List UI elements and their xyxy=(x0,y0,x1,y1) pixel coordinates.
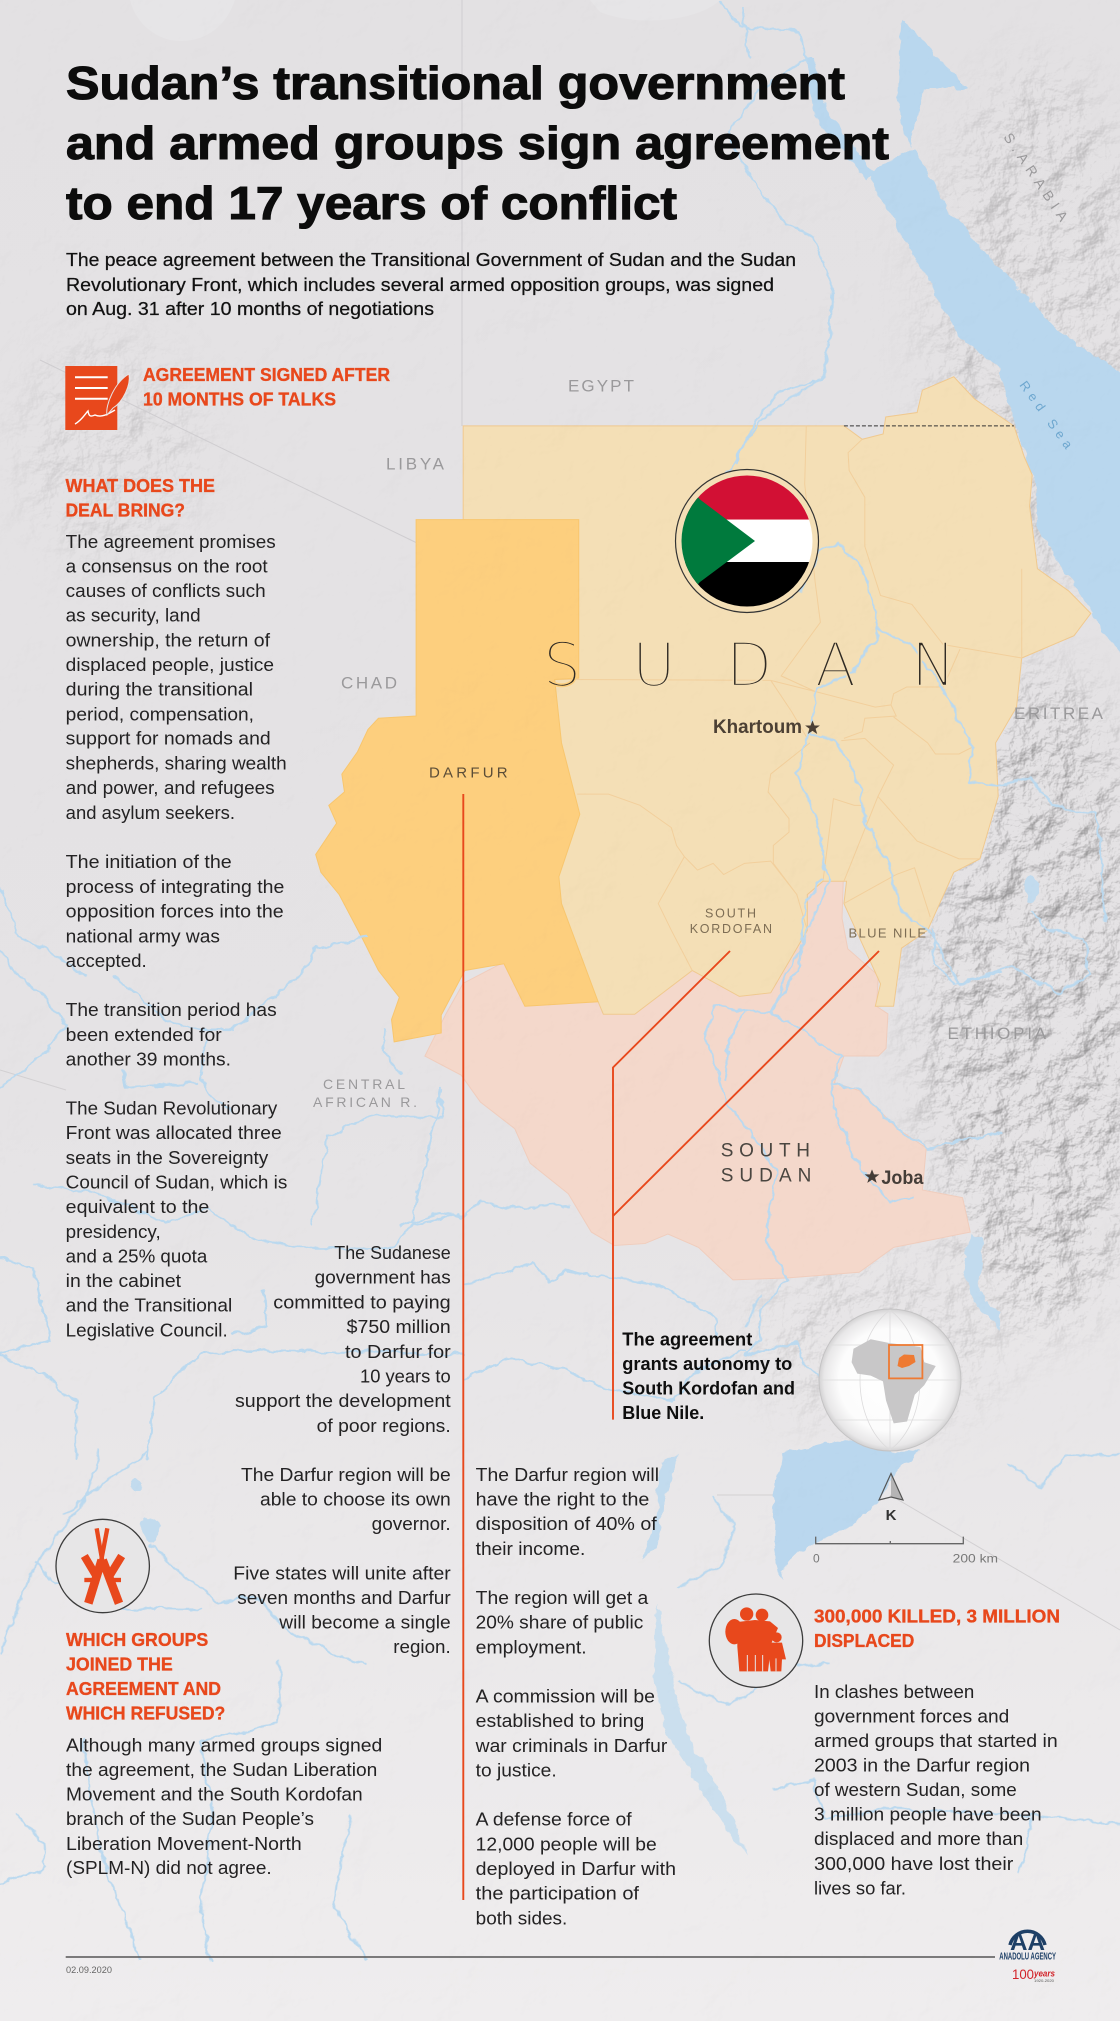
text block: what the deal brings: equivalent to the xyxy=(66,1197,209,1217)
text block: Darfur rights: 12,000 people will be xyxy=(476,1834,657,1854)
region labels: BLUE NILE xyxy=(848,925,926,940)
text block: Darfur rights: war criminals in Darfur xyxy=(475,1736,667,1756)
text block: what the deal brings: national army was xyxy=(66,926,220,946)
text block: what the deal brings: period, compensation, xyxy=(66,704,254,724)
text block: Darfur rights: established to bring xyxy=(476,1711,644,1731)
callout: autonomy: The agreement xyxy=(622,1330,752,1350)
text block: government commitments to Darfur: of poor regions. xyxy=(317,1416,451,1436)
text block: government commitments to Darfur: The Sudanese xyxy=(334,1243,451,1263)
scale bar: 0 xyxy=(813,1552,820,1566)
text block: what the deal brings: another 39 months. xyxy=(66,1050,231,1070)
text block: Darfur rights: both sides. xyxy=(476,1908,567,1928)
text block: groups xyxy=(66,1736,382,1878)
heading: agreement signed: 10 MONTHS OF TALKS xyxy=(143,389,336,410)
text block: killed and displaced: 3 million people have been xyxy=(814,1805,1042,1825)
heading: what does the deal bring xyxy=(66,475,215,521)
title xyxy=(66,57,889,229)
text block: what the deal brings: Legislative Council. xyxy=(66,1320,228,1340)
text block: what the deal brings xyxy=(66,532,287,1340)
region labels: DARFUR xyxy=(429,765,508,782)
logo: Anadolu Agency: AA xyxy=(1010,1929,1045,1956)
heading: which groups joined: WHICH GROUPS xyxy=(66,1629,208,1650)
text block: government commitments to Darfur: will become a single xyxy=(278,1612,451,1632)
text block: government commitments to Darfur: support the development xyxy=(235,1391,451,1411)
text block: Darfur rights: to justice. xyxy=(476,1761,557,1781)
logo: Anadolu Agency: 100 xyxy=(1012,1966,1034,1982)
text block: Darfur rights: employment. xyxy=(476,1637,587,1657)
text block: what the deal brings: been extended for xyxy=(66,1025,222,1045)
country labels: LIBYA xyxy=(386,455,445,474)
text block: what the deal brings: The agreement promises xyxy=(66,532,276,552)
country labels xyxy=(313,130,1104,1110)
flag of Sudan xyxy=(676,470,818,612)
text block: government commitments to Darfur: to Darfur for xyxy=(345,1342,451,1362)
subtitle: The peace agreement between the Transitional Government of Sudan and the Sudan xyxy=(66,249,796,270)
capital: Juba xyxy=(865,1168,924,1189)
heading: killed and displaced: DISPLACED xyxy=(814,1630,914,1651)
heading: which groups joined: AGREEMENT AND xyxy=(66,1678,221,1699)
heading: what does the deal bring: DEAL BRING? xyxy=(66,500,185,521)
text block: what the deal brings: support for nomads and xyxy=(66,729,271,749)
text block: what the deal brings: and the Transitional xyxy=(66,1296,232,1316)
text block: government commitments to Darfur: region. xyxy=(393,1637,451,1657)
region labels: SOUTH xyxy=(721,1141,810,1162)
text block: Darfur rights: A defense force of xyxy=(476,1810,633,1830)
leader lines xyxy=(463,794,879,1900)
country labels: AFRICAN R. xyxy=(313,1094,417,1110)
text block: what the deal brings: The initiation of the xyxy=(66,852,232,872)
region labels xyxy=(429,765,926,1187)
text block: what the deal brings: and a 25% quota xyxy=(66,1246,208,1266)
lakes xyxy=(130,877,1038,1855)
text block: killed and displaced: In clashes between xyxy=(814,1682,974,1702)
icon: document and pen xyxy=(65,366,129,430)
text block: killed and displaced: government forces and xyxy=(814,1706,1009,1726)
text block: groups: Although many armed groups signed xyxy=(66,1736,382,1756)
text block: killed and displaced: 300,000 have lost their xyxy=(814,1854,1013,1874)
text block: what the deal brings: shepherds, sharing wealth xyxy=(66,753,287,773)
capital: Khartoum: Khartoum xyxy=(713,717,802,738)
subtitle: on Aug. 31 after 10 months of negotiations xyxy=(66,298,434,319)
text block: Darfur rights: 20% share of public xyxy=(476,1613,643,1633)
region labels: SOUTH xyxy=(705,906,756,920)
label: Sudan: UDAN xyxy=(632,631,956,701)
scale bar: 200 km xyxy=(953,1552,998,1566)
region labels: KORDOFAN xyxy=(690,922,772,936)
text block: what the deal brings: opposition forces into the xyxy=(66,902,284,922)
label: Sudan: S xyxy=(543,631,581,701)
map: Darfur xyxy=(316,520,598,1042)
text block: what the deal brings: during the transitional xyxy=(66,680,253,700)
text block: Darfur rights xyxy=(475,1465,676,1928)
text block: what the deal brings: process of integrating the xyxy=(66,877,284,897)
text block: government commitments to Darfur: seven months and Darfur xyxy=(237,1588,451,1608)
country labels: S.ARABIA xyxy=(1001,130,1072,225)
text block: government commitments to Darfur: $750 million xyxy=(347,1317,451,1337)
heading: agreement signed xyxy=(143,364,390,410)
subtitle xyxy=(66,249,796,319)
text block: what the deal brings: Council of Sudan, which is xyxy=(66,1173,287,1193)
country labels: EGYPT xyxy=(568,376,634,396)
red sea xyxy=(805,19,1120,680)
text block: Darfur rights: their income. xyxy=(476,1539,585,1559)
text block: what the deal brings: a consensus on the root xyxy=(66,556,268,576)
text block: Darfur rights: disposition of 40% of xyxy=(476,1514,658,1534)
text block: government commitments to Darfur: The Darfur region will be xyxy=(241,1465,451,1485)
north arrow xyxy=(879,1474,903,1524)
callout: autonomy: South Kordofan and xyxy=(622,1378,795,1398)
heading: what does the deal bring: WHAT DOES THE xyxy=(66,475,215,496)
text block: what the deal brings: Front was allocated three xyxy=(66,1123,282,1143)
text block: what the deal brings: causes of conflicts such xyxy=(66,581,266,601)
scale bar xyxy=(813,1537,998,1566)
logo: Anadolu Agency: 1920-2020 xyxy=(1034,1978,1055,1983)
text block: government commitments to Darfur: governor. xyxy=(372,1514,451,1534)
text block: killed and displaced: of western Sudan, some xyxy=(814,1780,1017,1800)
logo: Anadolu Agency: years xyxy=(1033,1968,1055,1978)
footer rule xyxy=(66,1956,995,1958)
logo: Anadolu Agency xyxy=(999,1929,1056,1983)
text block: what the deal brings: The transition period has xyxy=(66,1000,277,1020)
text block: Darfur rights: The Darfur region will xyxy=(476,1465,659,1485)
text block: groups: Movement and the South Kordofan xyxy=(66,1785,363,1805)
text block: government commitments to Darfur: able to choose its own xyxy=(260,1490,451,1510)
text block: government commitments to Darfur: Five states will unite after xyxy=(233,1563,451,1583)
text block: killed and displaced: armed groups that started in xyxy=(814,1731,1058,1751)
text block: groups: branch of the Sudan People’s xyxy=(66,1809,314,1829)
logo: Anadolu Agency: ANADOLU AGENCY xyxy=(999,1951,1056,1962)
heading: killed and displaced: 300,000 KILLED, 3 MILLION xyxy=(814,1606,1060,1627)
text block: what the deal brings: and power, and refugees xyxy=(66,778,275,798)
text block: Darfur rights: A commission will be xyxy=(476,1686,655,1706)
date: 02.09.2020 xyxy=(66,1965,112,1976)
text block: groups: (SPLM-N) did not agree. xyxy=(66,1858,272,1878)
country labels: CHAD xyxy=(341,674,397,693)
title: Sudan’s transitional government xyxy=(66,57,845,109)
country labels: ETHIOPIA xyxy=(948,1024,1047,1043)
icon: crossed rifles xyxy=(56,1519,149,1613)
callout: autonomy: Blue Nile. xyxy=(622,1403,704,1423)
text block: killed and displaced: displaced and more than xyxy=(814,1829,1023,1849)
text block: what the deal brings: as security, land xyxy=(66,606,201,626)
capital: Juba: Joba xyxy=(881,1168,924,1189)
text block: killed and displaced xyxy=(814,1682,1058,1898)
country labels: Red Sea xyxy=(1017,378,1076,452)
text block: Darfur rights: the participation of xyxy=(476,1884,640,1904)
heading: which groups joined xyxy=(66,1629,225,1724)
text block: Darfur rights: deployed in Darfur with xyxy=(476,1859,676,1879)
heading: which groups joined: WHICH REFUSED? xyxy=(66,1702,225,1724)
text block: killed and displaced: lives so far. xyxy=(814,1878,906,1898)
text block: what the deal brings: The Sudan Revolutionary xyxy=(66,1098,277,1118)
text block: what the deal brings: presidency, xyxy=(66,1222,161,1242)
heading: killed and displaced xyxy=(814,1606,1060,1651)
text block: Darfur rights: have the right to the xyxy=(476,1490,649,1510)
text block: what the deal brings: displaced people, justice xyxy=(66,655,274,675)
heading: agreement signed: AGREEMENT SIGNED AFTER xyxy=(143,364,390,385)
text block: government commitments to Darfur xyxy=(233,1243,451,1657)
text block: what the deal brings: accepted. xyxy=(66,951,147,971)
text block: what the deal brings: in the cabinet xyxy=(66,1271,181,1291)
text block: killed and displaced: 2003 in the Darfur region xyxy=(814,1756,1030,1776)
region labels: SUDAN xyxy=(721,1166,811,1187)
text block: government commitments to Darfur: 10 years to xyxy=(360,1366,451,1386)
map: South Sudan xyxy=(425,803,970,1280)
icon: family xyxy=(709,1594,803,1687)
callout: autonomy: grants autonomy to xyxy=(622,1354,792,1374)
map: Sudan xyxy=(463,377,1091,1014)
text block: government commitments to Darfur: government has xyxy=(315,1268,451,1288)
country labels: ERITREA xyxy=(1014,704,1104,723)
text block: groups: Liberation Movement-North xyxy=(66,1834,302,1854)
title: to end 17 years of conflict xyxy=(66,177,677,229)
locator globe xyxy=(819,1309,961,1451)
subtitle: Revolutionary Front, which includes several armed opposition groups, was signed xyxy=(66,274,774,295)
callout: autonomy xyxy=(622,1330,795,1423)
text block: what the deal brings: seats in the Sovereignty xyxy=(66,1148,268,1168)
north arrow: K xyxy=(886,1507,897,1524)
text block: what the deal brings: and asylum seekers. xyxy=(66,803,235,823)
text block: government commitments to Darfur: committed to paying xyxy=(273,1292,451,1312)
heading: which groups joined: JOINED THE xyxy=(66,1653,173,1674)
country labels: CENTRAL xyxy=(323,1076,405,1092)
title: and armed groups sign agreement xyxy=(66,117,889,169)
text block: what the deal brings: ownership, the return of xyxy=(66,630,271,650)
text block: Darfur rights: The region will get a xyxy=(476,1588,649,1608)
text block: groups: the agreement, the Sudan Liberation xyxy=(66,1760,377,1780)
